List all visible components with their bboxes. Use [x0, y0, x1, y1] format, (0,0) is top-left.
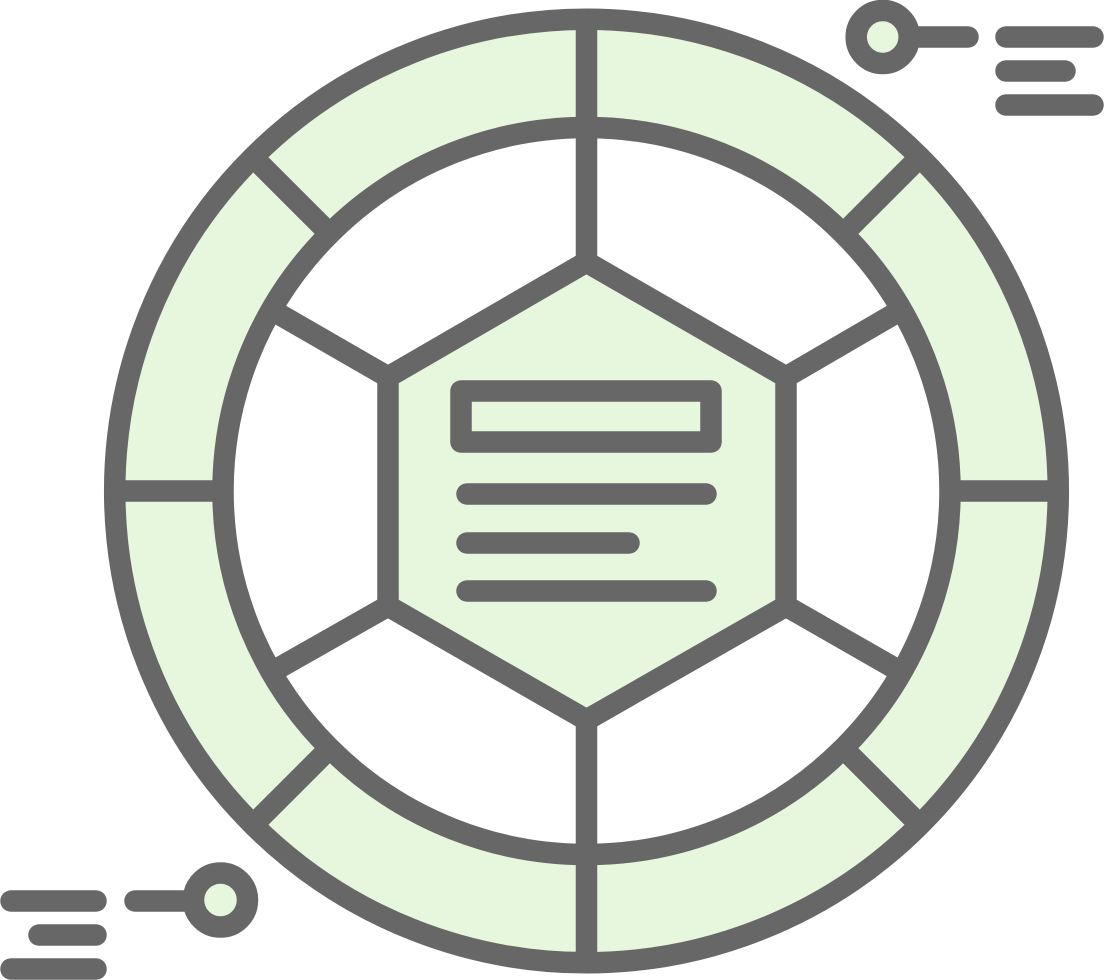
bottom left legend — [11, 873, 248, 969]
top spoke — [576, 20, 597, 262]
legend line 1 — [11, 890, 96, 912]
top right legend — [856, 10, 1093, 105]
text line 1 — [467, 483, 706, 505]
central hexagon with text card — [388, 262, 786, 720]
right outer divider — [950, 480, 1058, 502]
legend connector — [910, 26, 968, 48]
inner circle — [223, 128, 950, 854]
outer ring: green band — [169, 74, 1004, 908]
legend line 3 — [1006, 94, 1093, 116]
legend connector — [135, 890, 192, 912]
legend line 1 — [1006, 26, 1093, 48]
hexagon — [388, 262, 786, 720]
lower-left outer divider — [253, 748, 330, 825]
upper-right outer divider — [843, 157, 920, 234]
legend line 3 — [11, 958, 96, 980]
bottom spoke — [576, 720, 597, 962]
legend marker — [856, 10, 909, 64]
lower-right outer divider — [843, 748, 920, 825]
upper-left inner spoke — [277, 313, 388, 377]
legend line 2 — [1006, 60, 1065, 82]
text line 2 — [467, 532, 629, 554]
lower-left inner spoke — [277, 606, 388, 669]
left outer divider — [115, 480, 223, 502]
text line 3 — [467, 580, 706, 602]
lower-right inner spoke — [786, 606, 896, 669]
legend marker — [194, 873, 248, 927]
upper-left outer divider — [253, 157, 330, 234]
upper-right inner spoke — [786, 313, 896, 377]
legend line 2 — [39, 924, 96, 946]
title box — [461, 391, 711, 442]
